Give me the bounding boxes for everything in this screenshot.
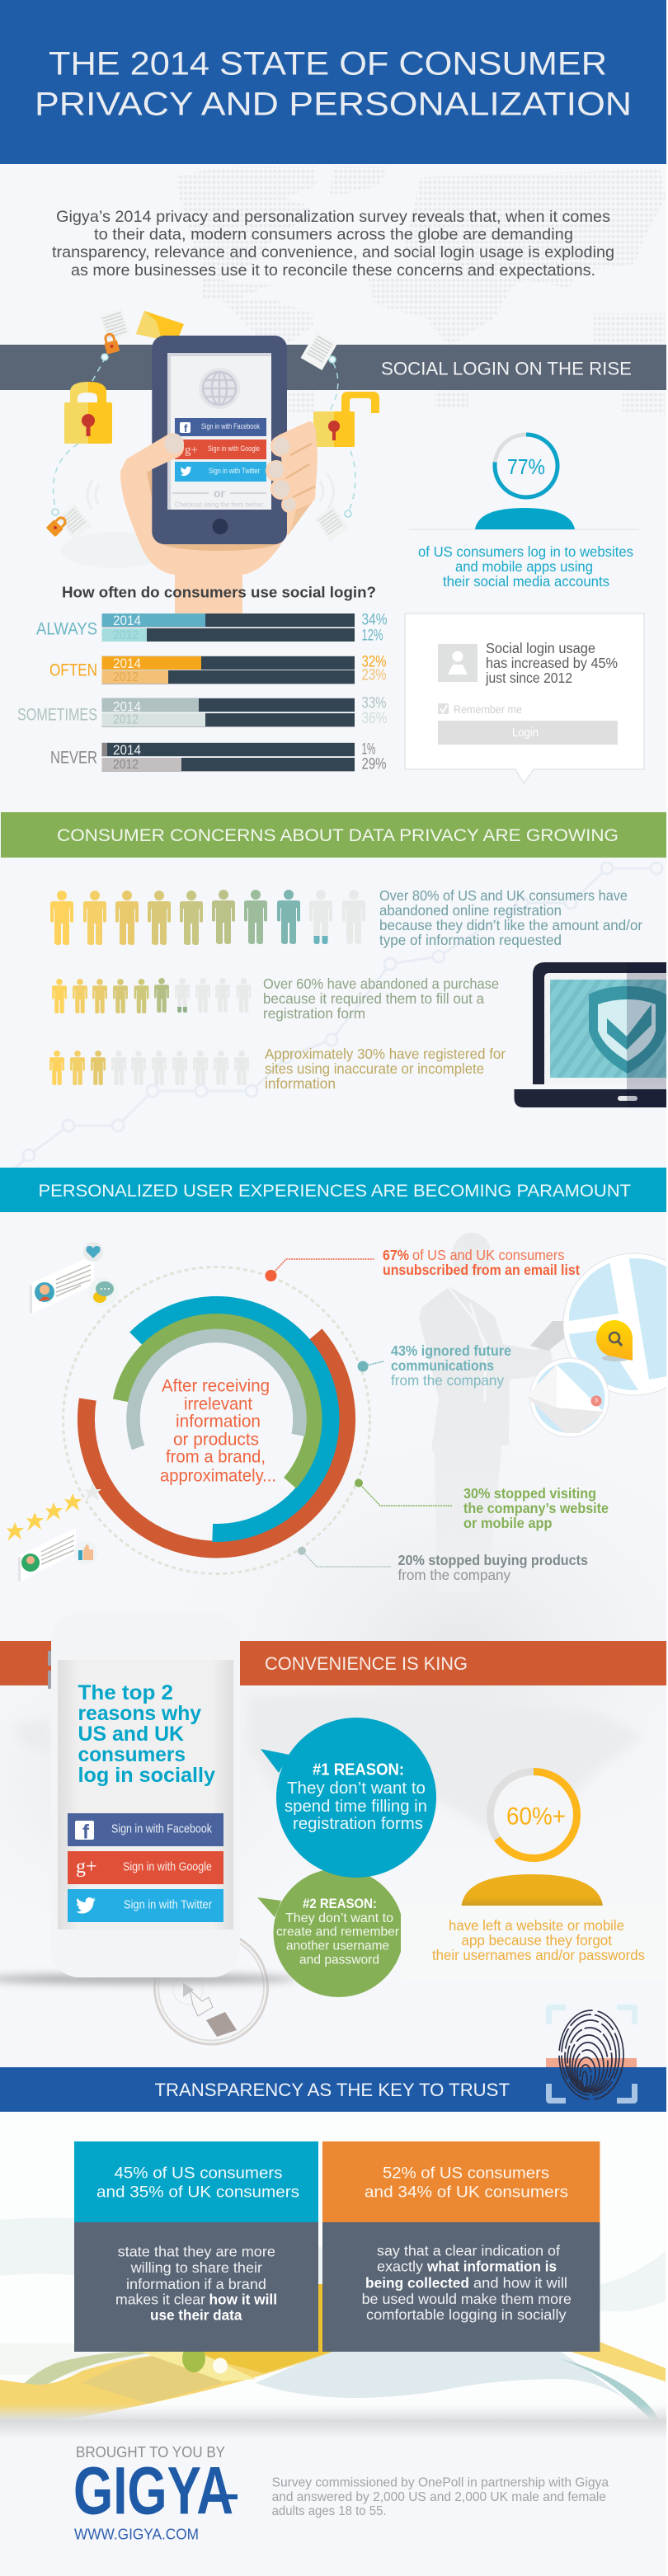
decorative faint cloud and signals [61, 473, 334, 568]
background line chart [15, 863, 662, 1168]
footer: website: WWW.GIGYA.COM [74, 2527, 199, 2543]
text: approximately 30 percent: sites using inaccurate or incomplete [265, 1060, 484, 1077]
title: THE 2014 STATE OF CONSUMER [49, 46, 607, 82]
icon: tablet [530, 1321, 565, 1351]
bars: never: 1% [361, 740, 376, 759]
section band: transparency [0, 2067, 666, 2112]
palm shadow [160, 533, 279, 551]
card heading: 52% of US consumers [383, 2164, 549, 2182]
blue speech bubble: spend time filling in [285, 1798, 427, 1816]
world map background: convenience [12, 1695, 643, 1888]
intro paragraph [52, 208, 614, 280]
footer shadow [0, 2420, 666, 2440]
checkout note: Checkout using the form below: [175, 500, 264, 508]
button: google: Sign in with Google [208, 444, 260, 454]
footer: brought to you by: BROUGHT TO YOU BY [76, 2444, 225, 2461]
section band: transparency: TRANSPARENCY AS THE KEY TO TRUST [155, 2080, 510, 2100]
text: over 60 percent: because it required them to fill out a [263, 990, 484, 1007]
bars: never: 2014 [113, 742, 141, 758]
star rating [7, 1483, 101, 1541]
bars: never: 29% [361, 755, 387, 773]
text: over 80 percent: because they didn’t like the amount and/or [379, 917, 642, 933]
home button [213, 519, 228, 534]
panel: right stat card [322, 2141, 600, 2352]
bars: sometimes: 36% [361, 710, 388, 727]
bars: often: OFTEN [49, 661, 97, 679]
divider with or [172, 487, 266, 500]
callout: 20 percent: 20% stopped buying products [398, 1552, 588, 1568]
callout: 43 percent [358, 1342, 511, 1389]
icon: thumb up [74, 1541, 97, 1564]
bars: never: 2012 [113, 758, 139, 772]
hand tap ring [155, 1931, 267, 2044]
button: facebook large [68, 1813, 223, 1846]
icon: heart [83, 1242, 103, 1262]
checkbox: Remember me [454, 703, 522, 716]
blue speech bubble: registration forms [293, 1815, 423, 1833]
dashed circle [63, 1267, 369, 1573]
card body [362, 2243, 572, 2323]
bars: often: 32% [361, 653, 387, 671]
people row: over 60 percent [52, 978, 251, 1013]
text: over 80 percent: Over 80% of US and UK consumers have [379, 887, 628, 904]
stat text: 60 percent: have left a website or mobile [449, 1917, 624, 1934]
fingernails [164, 434, 296, 511]
callout: 30 percent [355, 1479, 609, 1531]
phone heading: US and UK [78, 1723, 184, 1746]
logo: Gigya: GIGYA [73, 2454, 233, 2528]
button: facebook: f [184, 422, 188, 435]
card body: willing to share their [130, 2259, 262, 2276]
icon: documents [56, 308, 349, 542]
phone heading [78, 1681, 215, 1787]
review card top [30, 1242, 118, 1314]
card heading: and 34% of UK consumers [365, 2183, 568, 2202]
bars: always: 2014 [113, 613, 141, 628]
callout: 43 percent: communications [391, 1357, 494, 1374]
blue speech bubble: They don’t want to [287, 1779, 426, 1798]
title: PRIVACY AND PERSONALIZATION [35, 86, 632, 122]
callout: 67 percent: of US and UK consumers [412, 1247, 565, 1263]
login stat text [485, 640, 618, 686]
card body: makes it clear [115, 2291, 205, 2307]
icon: small orange locks [46, 332, 120, 537]
icon: right padlock [313, 392, 379, 447]
footer: survey note: adults ages 18 to 55. [272, 2504, 387, 2518]
card body: how it will [209, 2291, 277, 2307]
ring center text: irrelevant [184, 1395, 252, 1413]
card body: information if a brand [126, 2276, 266, 2292]
bars: sometimes: 33% [361, 694, 387, 712]
card body: what information is [426, 2258, 557, 2274]
intro paragraph: transparency, relevance and convenience, and social login usage is exploding [52, 243, 614, 261]
card heading [96, 2164, 299, 2202]
text: over 60 percent: Over 60% have abandoned a purchase [263, 975, 499, 992]
phone heading: log in socially [78, 1764, 215, 1787]
hand holding phone [120, 336, 318, 613]
callout: 67 percent: unsubscribed from an email list [383, 1262, 580, 1278]
text: over 60 percent: registration form [263, 1005, 365, 1022]
section band: data privacy [1, 812, 666, 858]
icon: fingerprint scanner [546, 2005, 637, 2104]
button: facebook [175, 418, 266, 436]
ring center text [160, 1377, 276, 1486]
review card bottom [18, 1528, 97, 1582]
bars: always: 12% [361, 627, 383, 645]
card body: and how it will [473, 2274, 567, 2291]
section band: personalized experiences [0, 1168, 667, 1212]
palm and forearm [120, 421, 318, 613]
silhouette shirt lines [448, 1286, 492, 1402]
button: twitter large: Sign in with Twitter [124, 1898, 212, 1911]
bars: sometimes: 2014 [113, 699, 141, 714]
icon: mail circle [526, 1358, 609, 1437]
section band: social login: SOCIAL LOGIN ON THE RISE [381, 358, 632, 379]
intro paragraph: to their data, modern consumers across the globe are demanding [94, 226, 573, 244]
icon: search pin [596, 1320, 633, 1361]
icon: envelope [136, 311, 184, 342]
people row: approximately 30 percent [49, 1051, 249, 1085]
login stat text: Social login usage [486, 640, 595, 656]
ring: blue 43 percent [136, 1305, 330, 1533]
section band: social login [0, 345, 667, 390]
ring: green 30 percent [121, 1322, 314, 1483]
connector end circles [52, 354, 351, 517]
stat text: 77 percent: their social media accounts [443, 573, 609, 590]
people row: over 80 percent [50, 890, 365, 945]
right page edge [666, 0, 668, 2576]
stat text: 60 percent: their usernames and/or passwords [432, 1947, 645, 1963]
intro paragraph: Gigya’s 2014 privacy and personalization survey reveals that, when it comes [56, 208, 610, 226]
callout: 20 percent: from the company [398, 1567, 510, 1583]
green speech bubble: #2 REASON: [303, 1897, 377, 1911]
card body: state that they are more [118, 2243, 275, 2259]
icon: laptop with shield [515, 962, 666, 1107]
section band: convenience [0, 1641, 667, 1685]
callout: 30 percent: 30% stopped visiting [463, 1485, 596, 1502]
bars: always: ALWAYS [36, 620, 97, 638]
world dot map background [177, 167, 666, 412]
avatar [438, 644, 477, 682]
footer: survey note: Survey commissioned by OnePoll in partnership with Gigya [272, 2475, 609, 2490]
text: approximately 30 percent: Approximately 30% have registered for [265, 1046, 506, 1062]
divider with or: or [214, 487, 226, 500]
section band: personalized experiences: PERSONALIZED USER EXPERIENCES ARE BECOMING PARAMOUNT [38, 1181, 631, 1201]
text: over 80 percent: abandoned online registration [379, 902, 562, 919]
icon: 60 percent person: 60%+ [506, 1803, 566, 1831]
ring center text: from a brand, [166, 1448, 266, 1466]
intro paragraph: as more businesses use it to reconcile these concerns and expectations. [71, 261, 595, 280]
text: over 80 percent: type of information requested [379, 932, 562, 948]
login button: Login [512, 726, 539, 740]
icon: globe [199, 368, 240, 409]
button: twitter large [68, 1889, 223, 1922]
heading: how often: How often do consumers use social login? [62, 584, 376, 600]
callout: 67 percent [266, 1247, 580, 1281]
section background: transparency [0, 2112, 666, 2420]
phone heading: The top 2 [78, 1681, 173, 1704]
callout: 43 percent: from the company [391, 1372, 504, 1389]
stat text: 77 percent: and mobile apps using [455, 558, 593, 575]
button: facebook large: Sign in with Facebook [111, 1822, 213, 1836]
ring center text: After receiving [162, 1377, 270, 1395]
green speech bubble: and password [299, 1953, 379, 1967]
text: approximately 30 percent: information [265, 1075, 336, 1092]
login box callout [405, 613, 644, 783]
ring center text: information [176, 1412, 261, 1431]
phone heading: reasons why [78, 1702, 201, 1725]
connector dashed paths [54, 359, 355, 510]
callout: 30 percent: or mobile app [463, 1515, 553, 1531]
green speech bubble: They don’t want to [285, 1911, 393, 1925]
bars: sometimes [17, 694, 388, 727]
section band: convenience: CONVENIENCE IS KING [265, 1653, 468, 1674]
footer: survey note: and answered by 2,000 US and 2,000 UK male and female [272, 2490, 606, 2504]
callout: 43 percent: 43% ignored future [391, 1342, 511, 1359]
green speech bubble: create and remember [276, 1925, 400, 1939]
text: over 80 percent [379, 887, 642, 948]
thumb and fingers [126, 421, 318, 536]
button: facebook: Sign in with Facebook [201, 422, 260, 431]
phone body [152, 336, 287, 544]
card body: be used would make them more [362, 2291, 572, 2307]
soft background glows [0, 1402, 668, 1963]
card heading: 45% of US consumers [114, 2164, 283, 2182]
card body [115, 2243, 277, 2324]
card body: exactly [377, 2258, 423, 2274]
bars: often: 23% [361, 666, 387, 684]
blue speech bubble [261, 1718, 436, 1878]
bars: always: 2012 [113, 628, 139, 642]
bars: always: 34% [361, 612, 388, 628]
bars: sometimes: 2012 [113, 712, 139, 727]
button: google large: g+ [76, 1856, 97, 1878]
white phone [0, 1613, 297, 1984]
header band [0, 0, 668, 164]
bars: never [50, 740, 387, 773]
green speech bubble: another username [286, 1939, 389, 1953]
card body: being collected [365, 2274, 469, 2291]
bars: never: NEVER [50, 749, 97, 767]
card heading [365, 2164, 568, 2202]
card heading: and 35% of UK consumers [96, 2183, 299, 2202]
blue speech bubble: #1 REASON: [313, 1761, 404, 1779]
ring: grey 20 percent [133, 1336, 299, 1448]
bars: often: 2012 [113, 670, 139, 684]
ring chart [86, 1305, 346, 1549]
icon: chat bubbles [88, 1277, 118, 1307]
text: approximately 30 percent [265, 1046, 506, 1092]
card body: say that a clear indication of [377, 2243, 560, 2259]
stat text: 60 percent: app because they forgot [462, 1932, 612, 1948]
ring center text: approximately... [160, 1466, 276, 1486]
title [35, 46, 632, 122]
login button [438, 721, 618, 745]
icon: 77 percent person: 77% [507, 454, 545, 479]
stat text: 77 percent [418, 543, 633, 590]
login stat text: just since 2012 [485, 670, 572, 686]
bar chart: social login frequency [17, 612, 388, 773]
notification badge: 3 [595, 1398, 598, 1403]
phone heading: consumers [78, 1743, 186, 1766]
icon: 77 percent person [409, 435, 639, 529]
bars: always [36, 612, 388, 645]
green speech bubble [257, 1869, 404, 1997]
button: google large [68, 1851, 223, 1884]
ring center text: or products [173, 1430, 259, 1450]
wave background [0, 2218, 666, 2421]
bars: often [49, 653, 387, 684]
button: google: g+ [185, 444, 198, 457]
callout: 30 percent: the company’s website [463, 1500, 609, 1516]
login stat text: has increased by 45% [486, 655, 618, 671]
callout: 20 percent [298, 1547, 588, 1583]
icon: 60 percent person [401, 1771, 666, 1980]
stat text: 60 percent [432, 1917, 645, 1963]
stat text: 77 percent: of US consumers log in to websites [418, 543, 633, 560]
bars: sometimes: SOMETIMES [17, 706, 97, 724]
button: twitter [175, 462, 266, 482]
callout: 67 percent: 67% [383, 1247, 409, 1263]
ring: orange 67 percent [86, 1334, 346, 1549]
panel: left stat card [74, 2141, 318, 2352]
button: google large: Sign in with Google [123, 1860, 212, 1873]
card body: use their data [150, 2307, 242, 2324]
icon: map circle [563, 1253, 668, 1402]
button: facebook large: f [82, 1821, 90, 1844]
text: over 60 percent [263, 975, 499, 1022]
bars: often: 2014 [113, 656, 141, 671]
button: google [175, 440, 266, 459]
footer: survey note [272, 2475, 609, 2518]
silhouette: businessman [419, 1233, 553, 1591]
button: twitter: Sign in with Twitter [209, 467, 260, 476]
icon: left padlock [64, 382, 112, 444]
card body: comfortable logging in socially [366, 2306, 567, 2323]
section band: data privacy: CONSUMER CONCERNS ABOUT DATA PRIVACY ARE GROWING [57, 825, 619, 845]
